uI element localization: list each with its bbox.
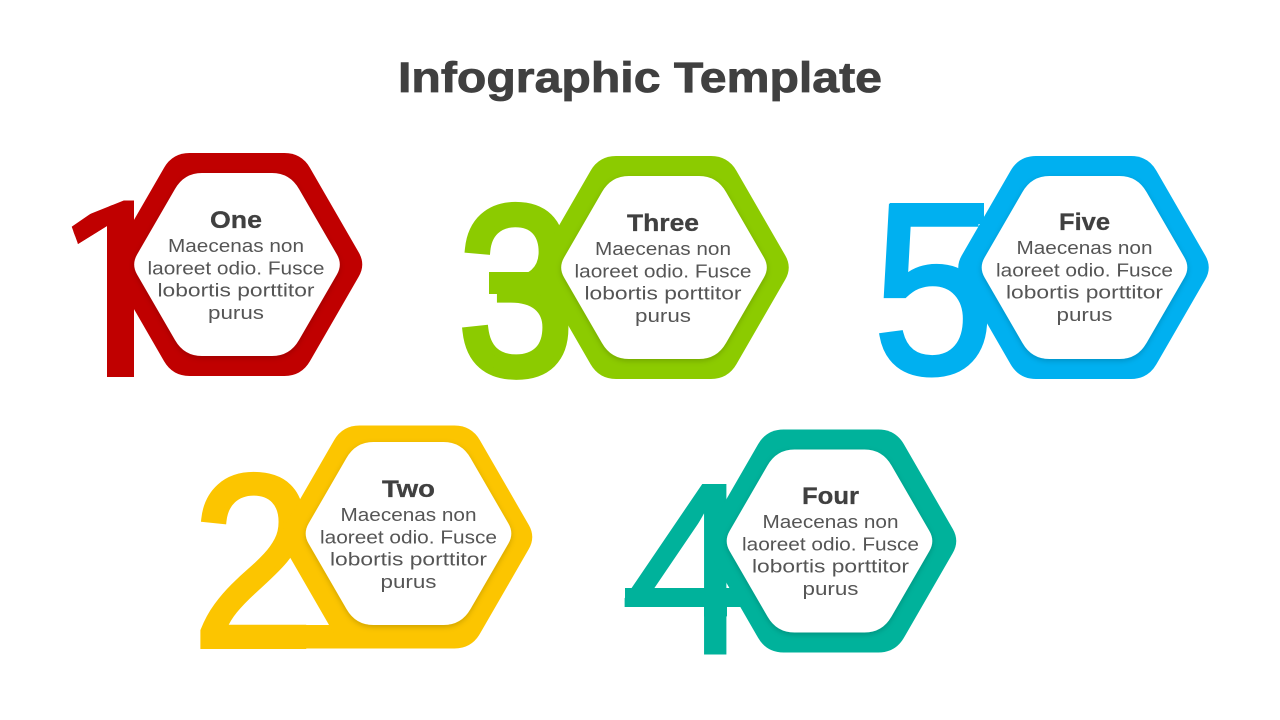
panel: three xyxy=(458,156,789,425)
text block: three: laoreet odio. Fusce xyxy=(574,260,752,281)
numeral 2: 2 xyxy=(192,425,315,699)
text block: three: Three xyxy=(627,210,699,237)
numeral 5: 5 xyxy=(873,154,994,424)
text block: three xyxy=(574,210,752,326)
panel: two xyxy=(192,425,532,699)
title: Infographic Template xyxy=(398,54,882,102)
text block: two: Maecenas non xyxy=(340,504,476,525)
hexagon frame: yellow xyxy=(282,426,532,648)
hexagon interior xyxy=(982,176,1187,359)
text block: five: Five xyxy=(1059,209,1110,236)
numeral 1: 1 xyxy=(46,151,186,430)
text block: three: lobortis porttitor xyxy=(584,282,742,304)
text block: five: lobortis porttitor xyxy=(1006,282,1163,302)
text block: five xyxy=(996,209,1173,325)
text block: four: lobortis porttitor xyxy=(752,556,909,576)
text block: one: One xyxy=(210,207,262,234)
text block: two: lobortis porttitor xyxy=(330,548,487,570)
text block: one xyxy=(148,207,324,323)
text block: four: Four xyxy=(802,483,859,510)
text block: five: Maecenas non xyxy=(1016,237,1152,258)
numeral 1 xyxy=(72,200,134,377)
text block: four xyxy=(742,483,919,599)
text block: one: laoreet odio. Fusce xyxy=(148,257,324,278)
hexagon frame: blue xyxy=(958,156,1209,379)
hexagon frame: green xyxy=(538,156,789,379)
numeral 2 xyxy=(192,425,370,699)
text block: five: purus xyxy=(1056,304,1112,325)
hexagon interior xyxy=(561,176,767,359)
text block: four: purus xyxy=(802,578,858,599)
panel: one xyxy=(72,153,362,377)
text block: four: Maecenas non xyxy=(762,511,898,532)
text block: three: Maecenas non xyxy=(595,238,731,259)
text block: one: lobortis porttitor xyxy=(158,280,314,300)
hexagon interior xyxy=(134,173,340,356)
panel: five xyxy=(873,154,1209,424)
panel: four xyxy=(612,430,956,706)
text block: one: purus xyxy=(208,302,264,323)
text block: five: laoreet odio. Fusce xyxy=(996,259,1173,280)
text block: one: Maecenas non xyxy=(168,235,304,256)
text block: two: Two xyxy=(382,476,435,503)
hexagon interior xyxy=(306,442,511,625)
numeral 4: 4 xyxy=(620,432,756,706)
text block: two xyxy=(320,476,497,592)
text block: two: laoreet odio. Fusce xyxy=(320,526,497,547)
numeral 3: 3 xyxy=(458,156,574,425)
text block: three: purus xyxy=(635,305,691,326)
text block: four: laoreet odio. Fusce xyxy=(742,533,919,554)
hexagon interior xyxy=(727,450,932,632)
text block: two: purus xyxy=(380,571,436,592)
hexagon frame: red xyxy=(112,153,362,376)
hexagon frame: teal xyxy=(706,430,956,652)
